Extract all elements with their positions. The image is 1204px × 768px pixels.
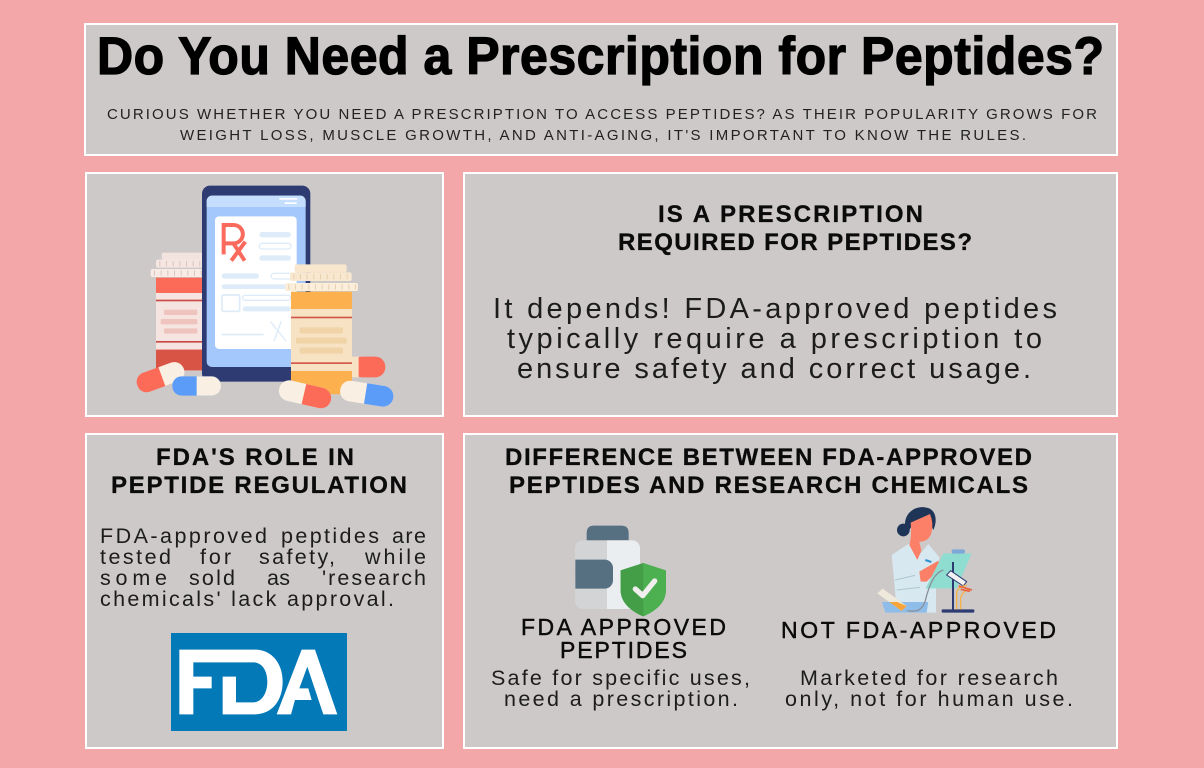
body text: are	[392, 524, 426, 548]
icon: scientist in lab	[877, 507, 974, 613]
Rx mark	[224, 225, 245, 261]
body text: some	[100, 566, 167, 590]
body text: 'research	[322, 566, 426, 590]
body text: FDA-approved	[100, 524, 267, 548]
body text: for	[200, 545, 231, 569]
icon: orange pill bottle	[285, 264, 358, 394]
panel: difference between FDA-approved and research chemicals	[464, 434, 1117, 748]
body text: It depends! FDA-approved peptides	[493, 293, 1057, 325]
heading: PEPTIDES AND RESEARCH CHEMICALS	[509, 472, 1028, 499]
icon: phone with prescription, bottles and pills	[134, 186, 395, 410]
panel: FDA's role	[86, 434, 443, 748]
heading: PEPTIDE REGULATION	[111, 472, 407, 499]
icon: medicine bottle with green shield	[575, 526, 666, 616]
icon: phone	[202, 186, 310, 382]
intro text: CURIOUS WHETHER YOU NEED A PRESCRIPTION TO ACCESS PEPTIDES? AS THEIR POPULARITY GROWS FOR	[107, 106, 1097, 123]
body text: as	[267, 566, 290, 590]
panel: header	[85, 24, 1117, 155]
heading	[618, 201, 972, 256]
text block: FDA approved peptides: need a prescription.	[504, 687, 738, 711]
icon: capsules	[134, 357, 395, 410]
heading	[111, 444, 407, 499]
body text: tested	[100, 545, 171, 569]
heading: IS A PRESCRIPTION	[658, 201, 923, 228]
body text: sold	[189, 566, 235, 590]
body text: chemicals' lack approval.	[100, 587, 394, 611]
panel: is a prescription required	[464, 173, 1117, 416]
title: Do You Need a Prescription for Peptides?	[97, 27, 1104, 85]
heading: DIFFERENCE BETWEEN FDA-APPROVED	[505, 444, 1032, 471]
body text: peptides	[281, 524, 379, 548]
text block: FDA approved peptides	[491, 614, 750, 711]
heading	[505, 444, 1032, 499]
intro text	[107, 106, 1097, 144]
text block: FDA approved peptides: PEPTIDES	[560, 637, 687, 663]
text block: not FDA-approved: Marketed for research	[800, 666, 1058, 690]
text block: not FDA-approved: only, not for human use.	[785, 687, 1073, 711]
body text	[493, 293, 1057, 385]
text block: FDA approved peptides: FDA APPROVED	[521, 614, 726, 640]
body text: typically require a prescription to	[507, 323, 1042, 355]
text block: not FDA-approved: NOT FDA-APPROVED	[781, 617, 1056, 643]
heading: FDA'S ROLE IN	[156, 444, 354, 471]
body text: safety,	[259, 545, 335, 569]
body text: while	[364, 545, 426, 569]
text block: FDA approved peptides: Safe for specific uses,	[491, 666, 750, 690]
text block: not FDA-approved	[781, 617, 1073, 711]
body text	[100, 524, 426, 611]
body text: ensure safety and correct usage.	[517, 353, 1031, 385]
intro text: WEIGHT LOSS, MUSCLE GROWTH, AND ANTI-AGING, IT'S IMPORTANT TO KNOW THE RULES.	[180, 127, 1026, 144]
heading: REQUIRED FOR PEPTIDES?	[618, 229, 972, 256]
icon: red pill bottle	[151, 253, 203, 370]
panel: prescription illustration	[86, 173, 443, 416]
icon: FDA logo	[171, 633, 347, 731]
